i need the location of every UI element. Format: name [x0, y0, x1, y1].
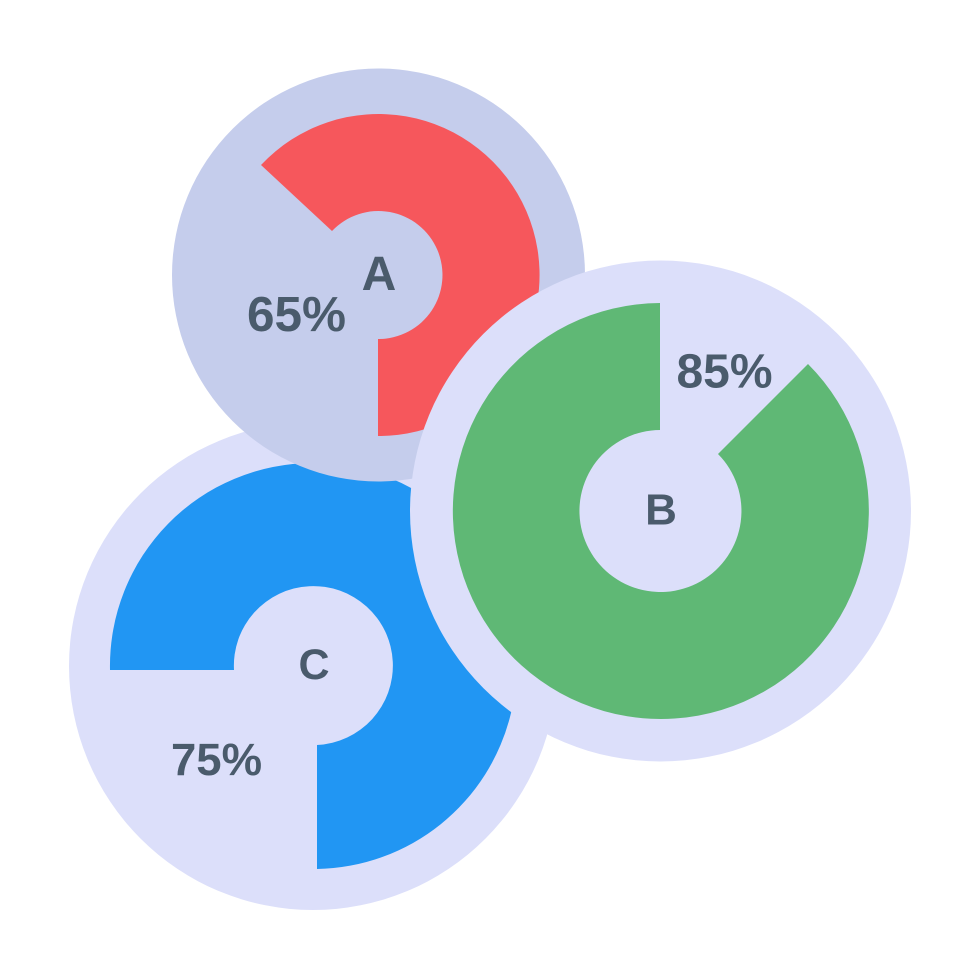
disc B — [410, 260, 911, 762]
green segment B — [453, 303, 869, 719]
label C: C — [298, 641, 330, 689]
label B: B — [645, 486, 677, 534]
chart C: 75% — [69, 422, 557, 910]
value 75%: 75% — [171, 734, 262, 785]
blue segment C — [110, 463, 517, 869]
value 85%: 85% — [676, 346, 773, 398]
red segment A — [261, 114, 540, 436]
chart A: 65% — [172, 68, 585, 482]
label A: A — [362, 248, 396, 301]
disc C — [69, 422, 557, 910]
chart B: 85% — [410, 260, 911, 762]
value 65%: 65% — [247, 287, 346, 342]
disc A — [172, 68, 585, 482]
